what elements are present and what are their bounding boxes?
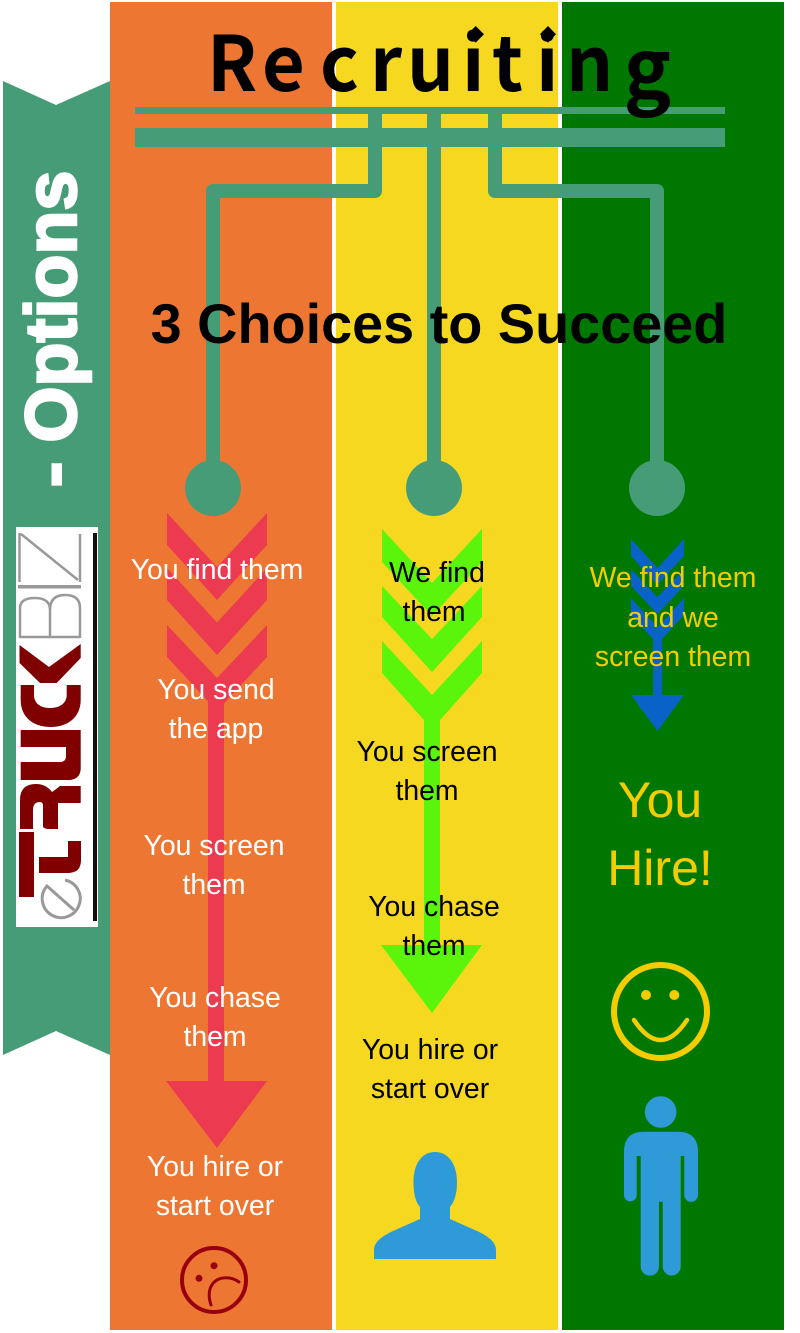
yellow column text: them (402, 930, 466, 962)
orange column text: You send (157, 674, 275, 706)
panel: green column (562, 2, 784, 1330)
orange column text: start over (156, 1190, 274, 1222)
subtitle: 3 Choices to Succeed (151, 292, 727, 355)
logo: eTruckBiz (16, 527, 98, 927)
logo letters: e (42, 880, 80, 918)
icon: happy face (614, 965, 707, 1058)
logo letters: C (21, 685, 81, 727)
orange column text: You find them (131, 554, 303, 586)
logo letters: K (20, 644, 81, 683)
yellow column text: You chase (368, 891, 500, 923)
logo letters: R (20, 784, 81, 829)
side ribbon (3, 81, 110, 1055)
orange column text: You hire or (147, 1151, 283, 1183)
arrow: red (166, 513, 267, 1148)
green column text: screen them (595, 641, 751, 673)
arrow: blue (631, 539, 684, 731)
yellow column text (356, 557, 500, 1105)
yellow column text: You hire or (362, 1034, 498, 1066)
side label: Options (0, 171, 98, 489)
logo letters: Z (20, 533, 80, 582)
orange column text: them (182, 869, 246, 901)
title: Recruitin (207, 3, 613, 113)
yellow column text: them (402, 596, 466, 628)
arrow: lime (381, 529, 482, 1013)
green column text: We find them (590, 562, 756, 594)
yellow column text: You screen (356, 736, 498, 768)
orange column text: You chase (149, 982, 281, 1014)
green column text: You (618, 772, 702, 828)
green column text: Hire! (607, 840, 713, 896)
icon: sad face (182, 1248, 246, 1312)
side label: Options: - (0, 460, 98, 489)
logo letters: B (20, 595, 80, 638)
panel: orange column (110, 2, 332, 1330)
logo letters: T (19, 832, 34, 897)
panel: yellow column (336, 2, 558, 1330)
yellow column text: start over (371, 1073, 489, 1105)
icon: standing person (624, 1096, 698, 1276)
orange column text: You screen (143, 830, 285, 862)
orange column text: them (183, 1021, 247, 1053)
green column text (590, 562, 756, 896)
orange column text (131, 554, 303, 1222)
orange column text: the app (169, 713, 263, 745)
title: g (624, 4, 671, 122)
logo letters: t (39, 841, 81, 873)
connector lines (135, 107, 725, 516)
icon: bust silhouette (374, 1152, 496, 1259)
green column text: and we (627, 602, 719, 634)
yellow column text: We find (389, 557, 485, 589)
yellow column text: them (395, 775, 459, 807)
side label: Options: Options (12, 171, 92, 442)
logo letters: U (21, 730, 81, 780)
